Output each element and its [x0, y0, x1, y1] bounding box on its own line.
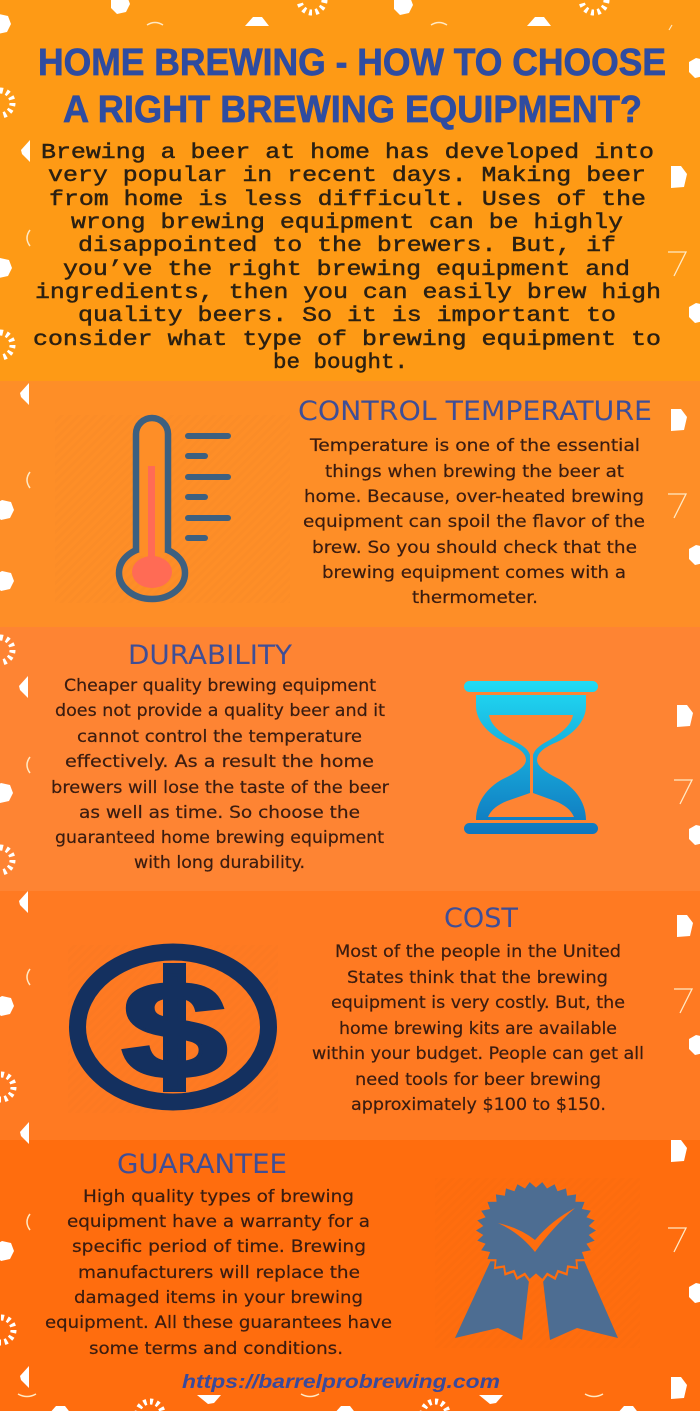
intro paragraph: quality beers. So it is important to — [78, 305, 616, 328]
text block: control temperature: home. Because, over-heated brewing — [304, 487, 644, 506]
icon: thermometer — [55, 415, 290, 603]
text block: cost: need tools for beer brewing — [355, 1070, 601, 1089]
intro paragraph: you’ve the right brewing equipment and — [63, 259, 630, 282]
panel: control temperature — [55, 396, 652, 607]
icon: award ribbon — [435, 1178, 640, 1348]
heading: control temperature: CONTROL TEMPERATURE — [298, 396, 652, 427]
text block: control temperature: brew. So you should check that the — [312, 538, 637, 557]
text block: guarantee: specific period of time. Brewing — [72, 1237, 366, 1256]
text block: guarantee: damaged items in your brewing — [74, 1288, 363, 1307]
text block: cost — [312, 942, 644, 1114]
heading: durability: DURABILITY — [128, 640, 293, 671]
text block: guarantee: equipment have a warranty for a — [67, 1212, 370, 1231]
title: A RIGHT BREWING EQUIPMENT? — [63, 89, 642, 131]
text block: guarantee: equipment. All these guarantees have — [45, 1313, 392, 1332]
title — [38, 42, 666, 131]
text block: durability: does not provide a quality beer and it — [55, 701, 386, 720]
intro paragraph: wrong brewing equipment can be highly — [71, 212, 623, 235]
text block: cost: approximately $100 to $150. — [351, 1095, 606, 1114]
intro paragraph: very popular in recent days. Making beer — [48, 165, 646, 188]
icon: dollar coin: $ — [121, 953, 228, 1108]
text block: durability: Cheaper quality brewing equipment — [64, 676, 377, 695]
intro paragraph: be bought. — [273, 352, 408, 375]
text block: control temperature: Temperature is one of the essential — [309, 436, 640, 455]
text block: durability: with long durability. — [134, 853, 305, 872]
heading: cost: COST — [444, 903, 518, 934]
panel: cost — [68, 903, 644, 1114]
text block: cost: Most of the people in the United — [335, 942, 621, 961]
intro paragraph: Brewing a beer at home has developed into — [41, 142, 654, 165]
intro paragraph: ingredients, then you can easily brew high — [35, 282, 661, 305]
text block: guarantee — [45, 1187, 392, 1358]
text block: durability — [51, 676, 389, 872]
text block: cost: equipment is very costly. But, the — [331, 993, 625, 1012]
text block: guarantee: High quality types of brewing — [83, 1187, 354, 1206]
text block: guarantee: some terms and conditions. — [89, 1339, 343, 1358]
text block: cost: States think that the brewing — [347, 968, 608, 987]
text block: cost: home brewing kits are available — [339, 1019, 617, 1038]
panel: guarantee — [45, 1149, 640, 1358]
text block: guarantee: manufacturers will replace the — [78, 1263, 360, 1282]
text block: durability: guaranteed home brewing equipment — [55, 828, 385, 847]
text block: control temperature: things when brewing the beer at — [325, 462, 625, 481]
intro paragraph: consider what type of brewing equipment to — [33, 329, 661, 352]
icon: hourglass — [464, 681, 598, 834]
intro paragraph: from home is less difficult. Uses of the — [49, 189, 646, 212]
icon: dollar coin — [68, 945, 278, 1113]
text block: durability: as well as time. So choose the — [79, 803, 360, 822]
intro paragraph: disappointed to the brewers. But, if — [78, 235, 616, 258]
text block: control temperature: brewing equipment comes with a — [322, 563, 626, 582]
title: HOME BREWING - HOW TO CHOOSE — [38, 42, 666, 84]
heading: guarantee: GUARANTEE — [117, 1149, 287, 1180]
text block: control temperature: equipment can spoil the flavor of the — [303, 512, 645, 531]
text block: durability: cannot control the temperature — [77, 727, 362, 746]
text block: control temperature: thermometer. — [412, 588, 538, 607]
panel: durability — [51, 640, 598, 872]
intro paragraph — [33, 142, 661, 375]
website link: https://barrelprobrewing.com — [182, 1372, 500, 1393]
text block: durability: brewers will lose the taste of the beer — [51, 778, 389, 797]
text block: control temperature — [303, 436, 645, 607]
text block: durability: effectively. As a result the home — [65, 752, 374, 771]
text block: cost: within your budget. People can get all — [312, 1044, 644, 1063]
